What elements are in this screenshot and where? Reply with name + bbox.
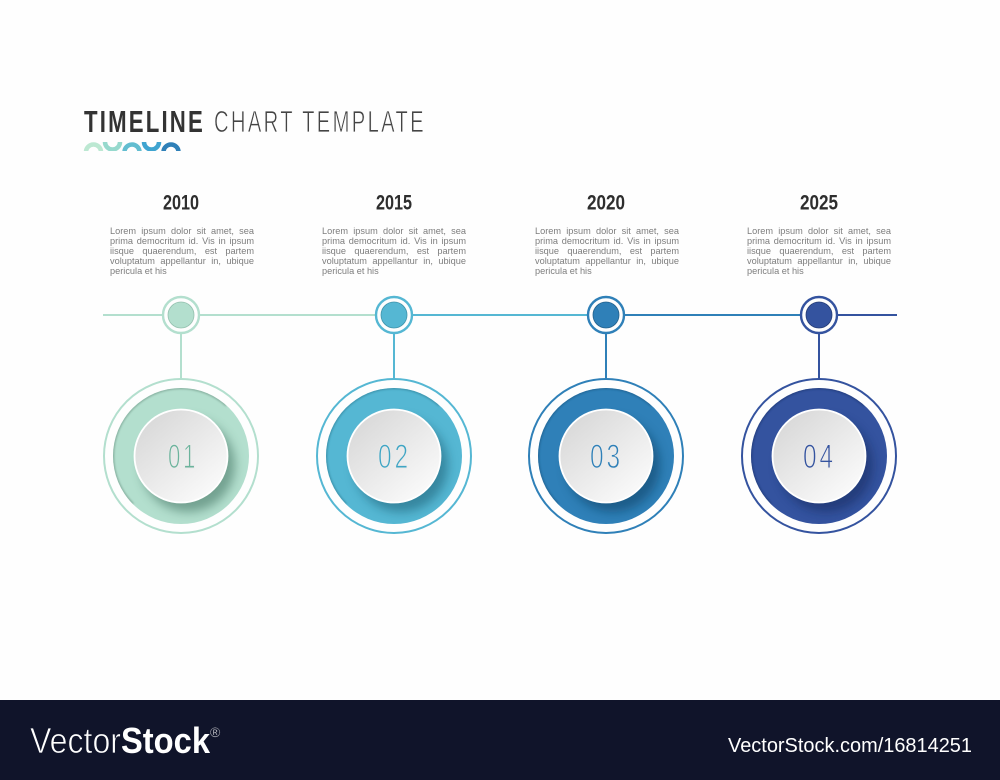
text block 2010: prima democritum id. Vis in ipsum <box>110 236 254 246</box>
panel: 2025 <box>741 195 897 534</box>
node 2025 <box>801 297 837 333</box>
text block 2015: prima democritum id. Vis in ipsum <box>322 236 466 246</box>
text block 2020: iisque quaerendum, est partem <box>535 246 679 256</box>
text block 2020 <box>535 226 679 278</box>
footer logo: Vector <box>30 720 121 761</box>
connector 2015 <box>393 333 395 379</box>
title <box>84 105 426 139</box>
footer logo: ® <box>210 724 221 740</box>
text block 2025: pericula et his <box>747 266 804 276</box>
badge 02: 02 <box>378 438 411 476</box>
text block 2025: iisque quaerendum, est partem <box>747 246 891 256</box>
text block 2010: iisque quaerendum, est partem <box>110 246 254 256</box>
badge 01: 01 <box>168 438 198 476</box>
text block 2025: voluptatum appellantur in, ubique <box>747 256 891 266</box>
footer logo <box>30 720 221 761</box>
badge 04 <box>741 378 897 534</box>
year 2025: 2025 <box>800 192 838 214</box>
badge 04: 04 <box>803 438 836 476</box>
footer image id: VectorStock.com/16814251 <box>728 734 972 757</box>
text block 2025: prima democritum id. Vis in ipsum <box>747 236 891 246</box>
text block 2015: voluptatum appellantur in, ubique <box>322 256 466 266</box>
badge 02 <box>316 378 472 534</box>
year 2010: 2010 <box>163 192 199 214</box>
panel: 2020 <box>528 195 684 534</box>
timeline line <box>103 314 897 316</box>
text block 2020: voluptatum appellantur in, ubique <box>535 256 679 266</box>
connector 2025 <box>818 333 820 379</box>
year 2020: 2020 <box>587 192 625 214</box>
text block 2025: Lorem ipsum dolor sit amet, sea <box>747 226 891 236</box>
text block 2025 <box>747 226 891 278</box>
text block 2010: Lorem ipsum dolor sit amet, sea <box>110 226 254 236</box>
text block 2015: iisque quaerendum, est partem <box>322 246 466 256</box>
text block 2015: Lorem ipsum dolor sit amet, sea <box>322 226 466 236</box>
text block 2010: pericula et his <box>110 266 167 276</box>
footer logo: Stock <box>121 720 211 761</box>
title: CHART TEMPLATE <box>214 105 426 139</box>
title wave decoration <box>86 142 178 152</box>
text block 2020: Lorem ipsum dolor sit amet, sea <box>535 226 679 236</box>
text block 2010 <box>110 226 254 278</box>
year 2015: 2015 <box>376 192 412 214</box>
node 2020 <box>588 297 624 333</box>
connector 2010 <box>180 333 182 379</box>
connector 2020 <box>605 333 607 379</box>
badge 01 <box>103 378 259 534</box>
node 2015 <box>376 297 412 333</box>
text block 2020: prima democritum id. Vis in ipsum <box>535 236 679 246</box>
text block 2020: pericula et his <box>535 266 592 276</box>
badge 03 <box>528 378 684 534</box>
badge 03: 03 <box>590 438 623 476</box>
panel: 2015 <box>316 195 472 534</box>
text block 2015: pericula et his <box>322 266 379 276</box>
text block 2015 <box>322 226 466 278</box>
title: TIMELINE <box>84 105 205 139</box>
footer bar <box>0 700 1000 780</box>
panel: 2010 <box>103 195 259 534</box>
node 2010 <box>163 297 199 333</box>
text block 2010: voluptatum appellantur in, ubique <box>110 256 254 266</box>
